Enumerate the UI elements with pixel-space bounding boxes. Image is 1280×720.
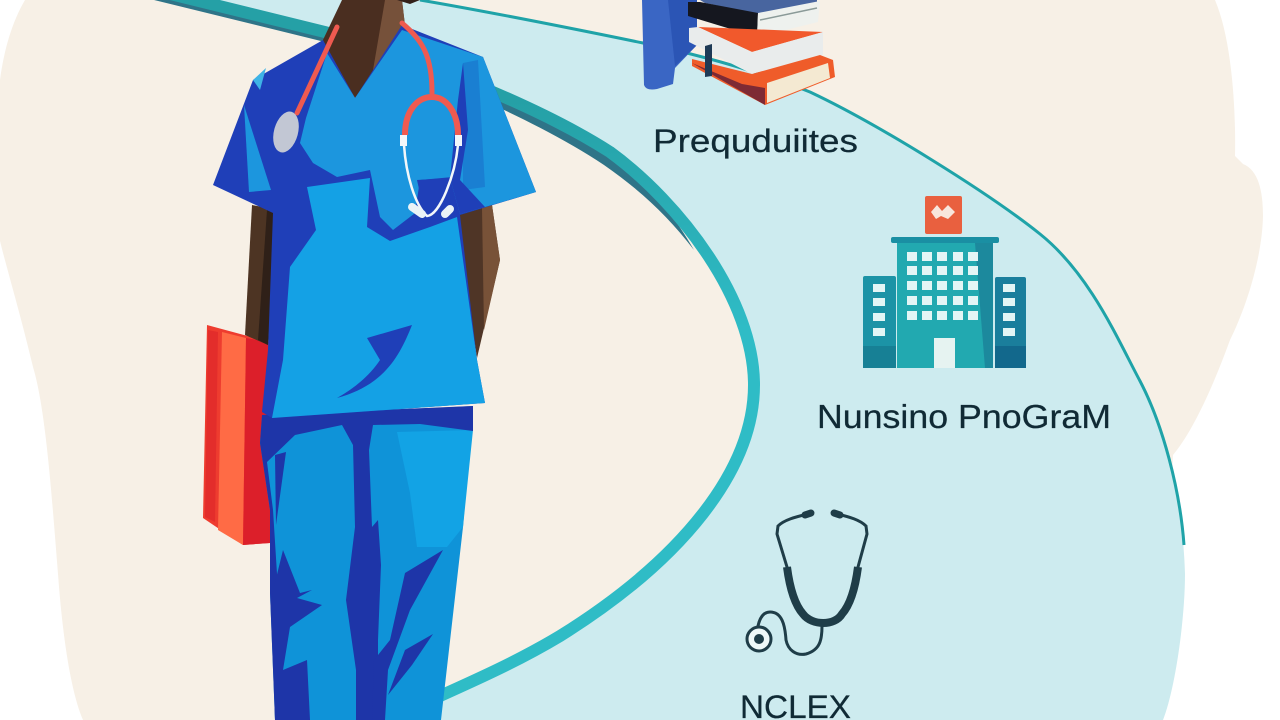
- pathway inner curve: [150, 0, 754, 696]
- icon: stethoscope: [747, 513, 867, 654]
- label: prerequisites: Prequduiites: [653, 123, 858, 159]
- stethoscope on nurse: [269, 23, 462, 216]
- icon: book stack: [642, 0, 835, 105]
- pathway band: [190, 0, 1185, 720]
- pathway outer line: [420, 0, 1184, 545]
- red bag: [203, 325, 270, 545]
- neck: [322, 0, 420, 98]
- nurse figure: [203, 0, 536, 720]
- trousers: [260, 406, 473, 720]
- label: nursing program: Nunsino PnoGraM: [817, 398, 1111, 435]
- arms: [245, 205, 500, 358]
- icon: hospital: [863, 196, 1026, 368]
- scrub top: [213, 25, 536, 418]
